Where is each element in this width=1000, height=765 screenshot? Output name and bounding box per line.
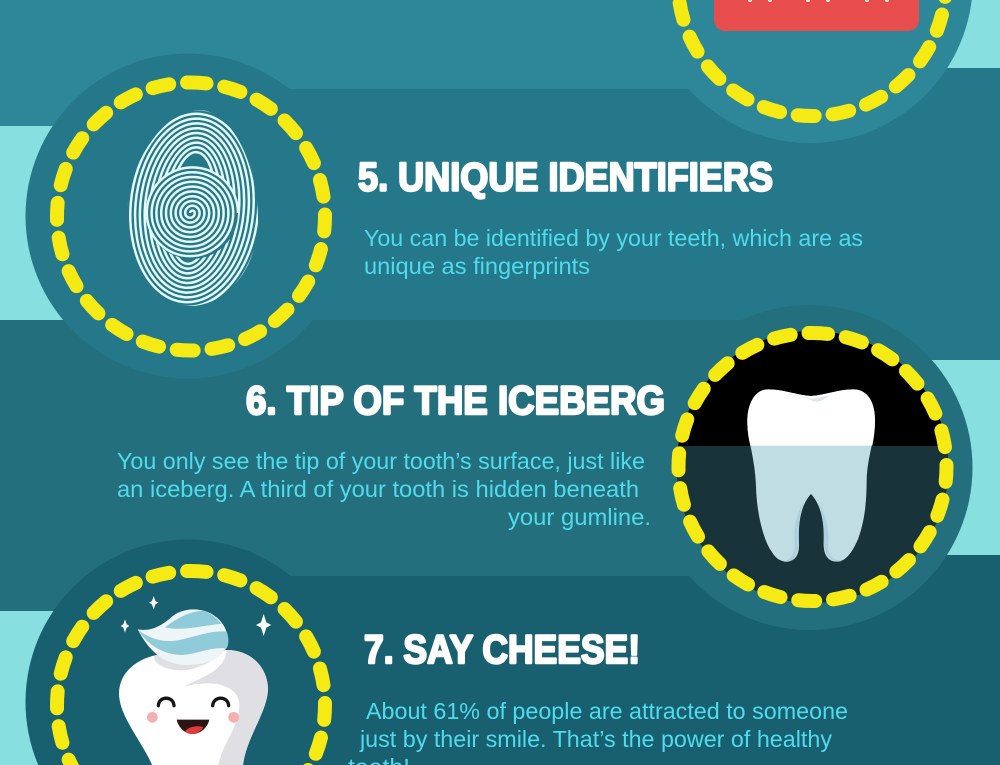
text block: fact 5: You can be identified by your teeth, which are as xyxy=(364,225,863,251)
face xyxy=(147,698,239,734)
text block: fact 7: About 61% of people are attracted to someone xyxy=(366,698,848,724)
text block: fact 6: You only see the tip of your tooth’s surface, just like xyxy=(117,448,645,474)
icon: fingerprint xyxy=(127,110,258,306)
icon: smiling tooth xyxy=(119,596,271,765)
text block: fact 5 xyxy=(364,225,863,279)
icon: tooth half hidden xyxy=(747,389,875,562)
heading: fact 5: 5. UNIQUE IDENTIFIERS xyxy=(358,156,773,200)
gum line disc xyxy=(676,331,948,603)
text block: fact 5: unique as fingerprints xyxy=(364,253,590,279)
heading: fact 7: 7. SAY CHEESE! xyxy=(364,628,640,672)
sparkles xyxy=(121,596,271,636)
text block: fact 7 xyxy=(348,698,848,765)
text block: fact 6 xyxy=(117,448,651,530)
panel: fact 5 badge with fingerprint xyxy=(26,54,350,378)
panel: fact 6 badge with tooth xyxy=(648,305,972,630)
heading: fact 6: 6. TIP OF THE ICEBERG xyxy=(246,379,665,423)
icon: red gum block xyxy=(714,0,919,31)
text block: fact 7: just by their smile. That’s the power of healthy xyxy=(359,726,832,752)
text block: fact 6: your gumline. xyxy=(508,504,651,530)
text block: fact 6: an iceberg. A third of your tooth is hidden beneath xyxy=(117,476,639,502)
panel: fact 7 badge with smiling tooth xyxy=(26,540,350,765)
toothpaste swirl xyxy=(138,609,228,665)
panel: fact 4 badge with red icon xyxy=(647,0,973,143)
